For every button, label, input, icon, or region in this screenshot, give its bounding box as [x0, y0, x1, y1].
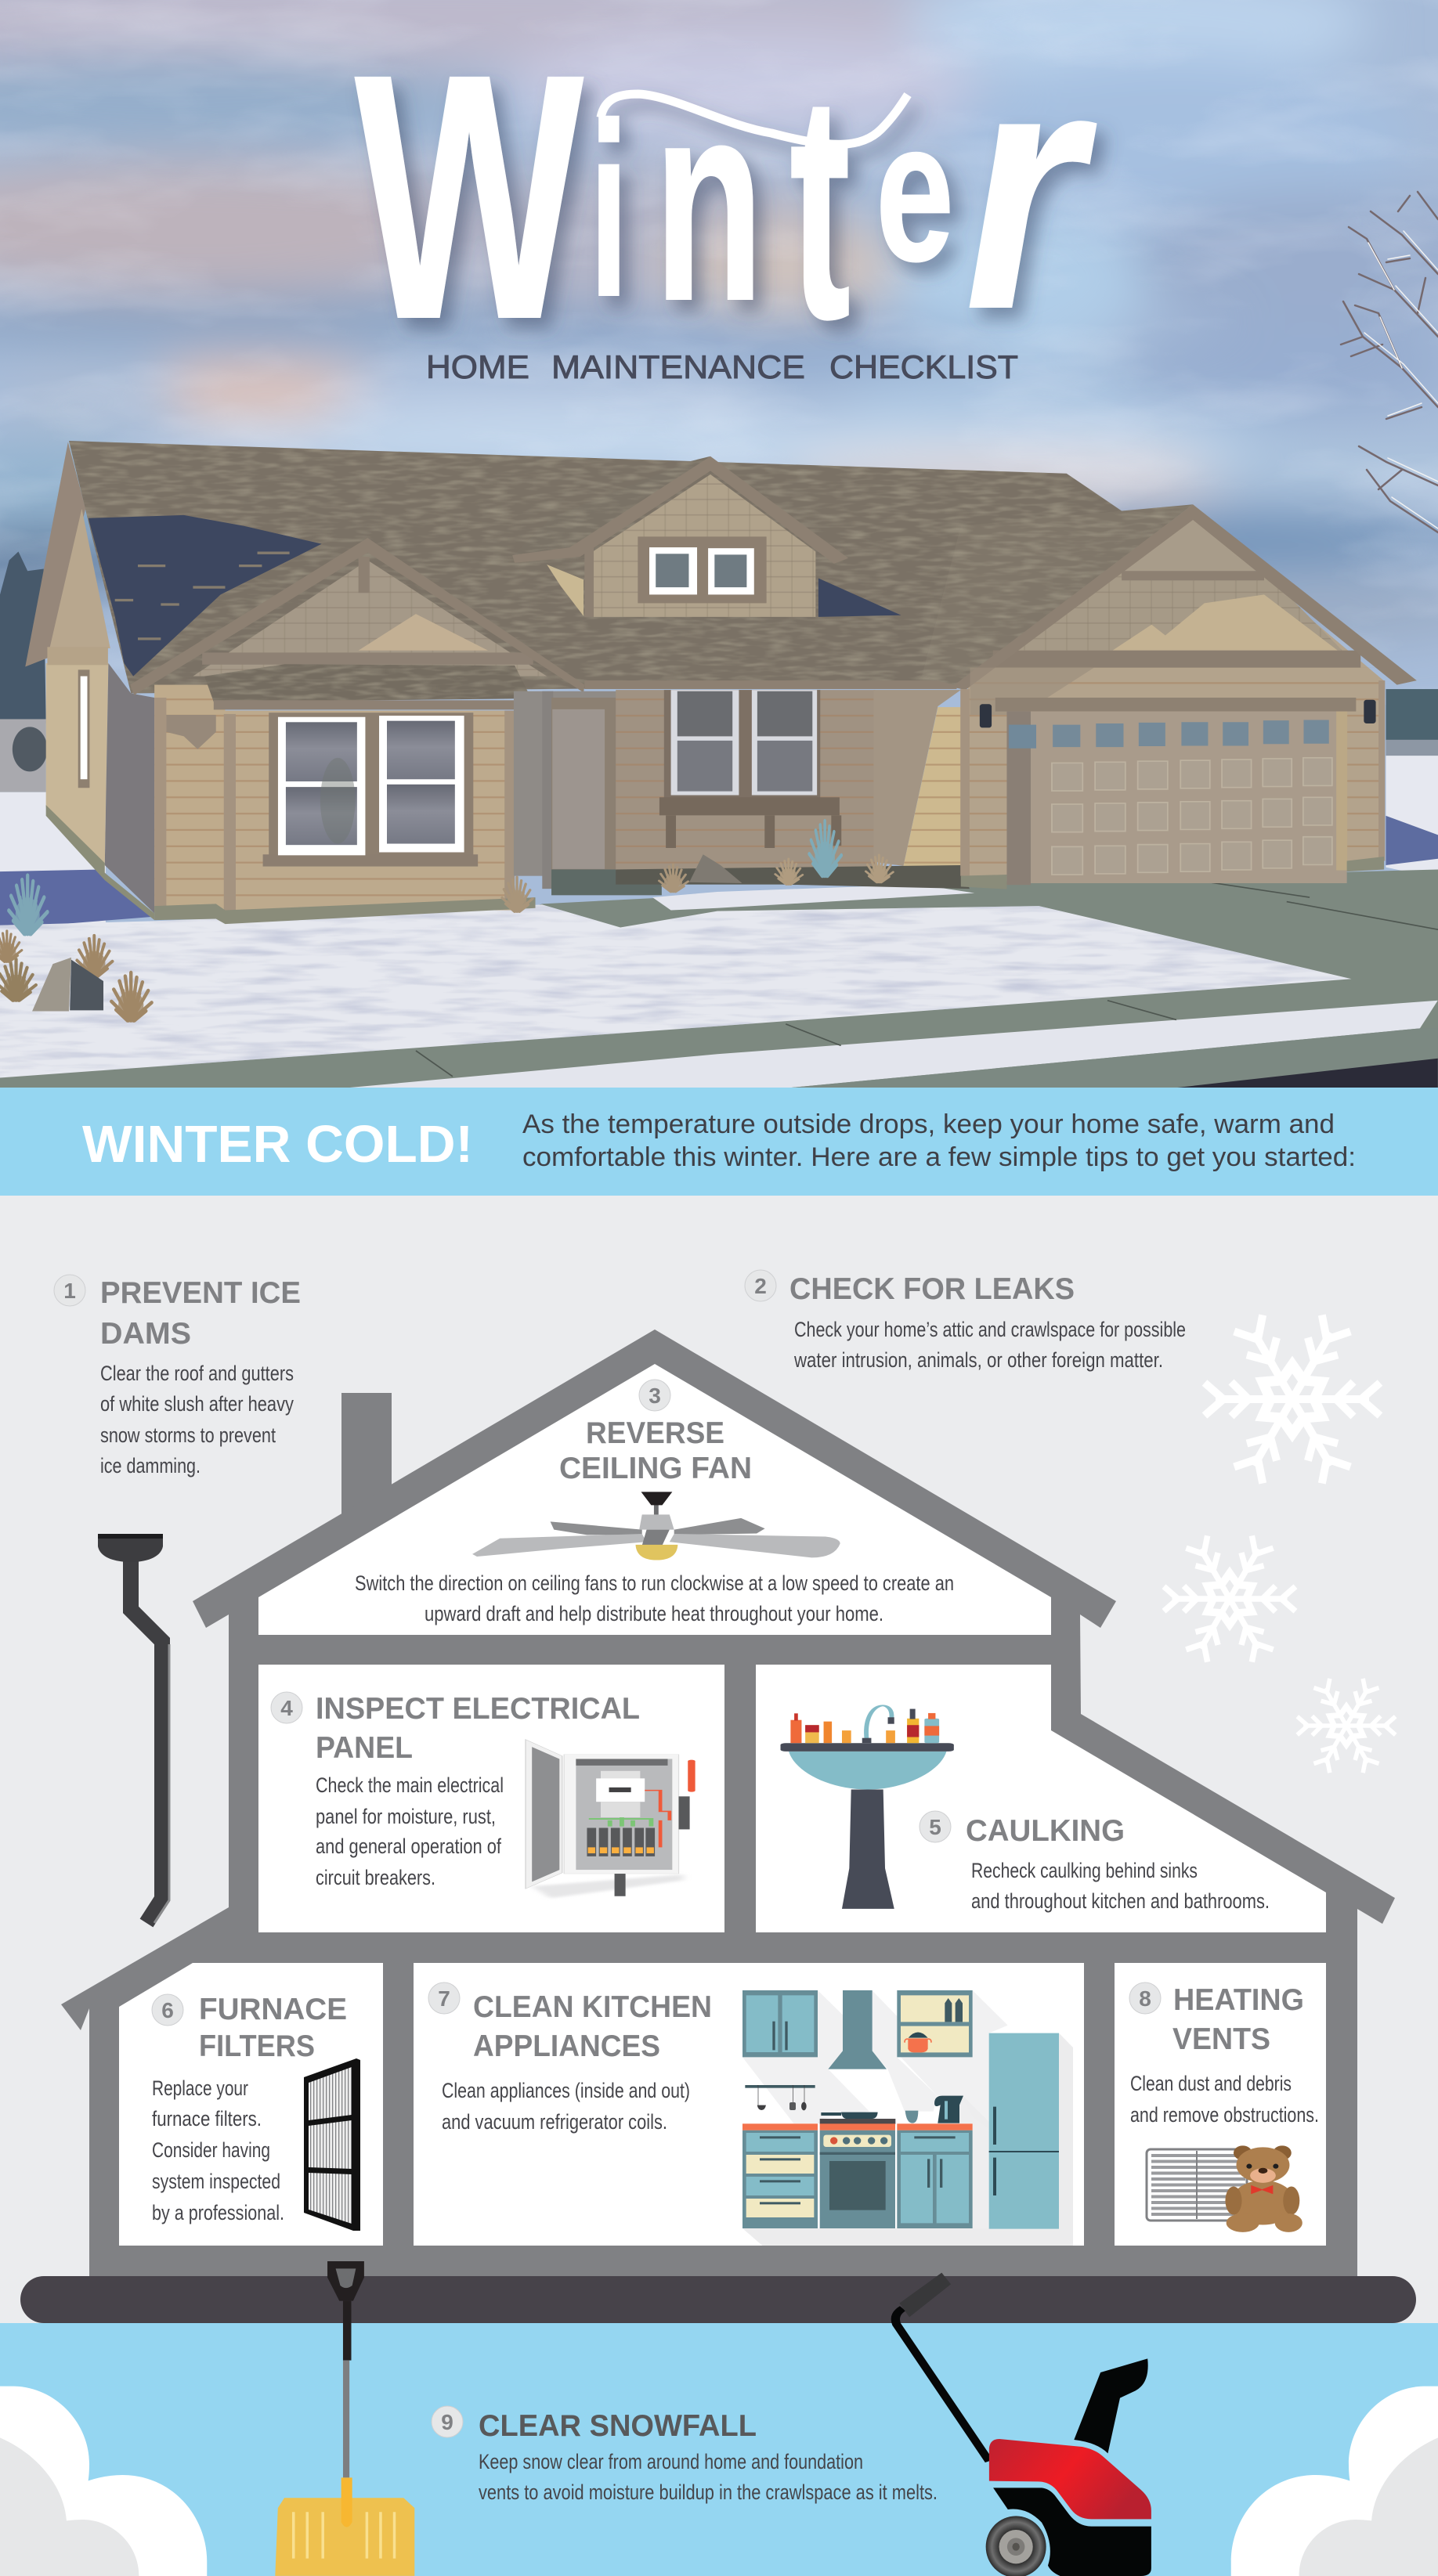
title word: e — [876, 80, 954, 303]
body 2: Check your home’s attic and crawlspace for possible — [794, 1318, 1186, 1341]
heading 5: CAULKING — [966, 1814, 1125, 1848]
intro text — [522, 1109, 1356, 1172]
room: furnace filters — [119, 1963, 383, 2246]
body 6: Consider having — [152, 2138, 270, 2162]
body 4: Check the main electrical — [316, 1773, 504, 1797]
bare tree branches — [1341, 192, 1438, 532]
main roof — [69, 441, 1122, 694]
number badge 9: 9 — [441, 2410, 453, 2434]
number badge 8 — [1129, 1983, 1161, 2014]
snowy ground and driveway — [0, 756, 1438, 1089]
number badge 4: 4 — [280, 1696, 293, 1720]
wall lamps — [980, 700, 1376, 727]
icon: air vent — [1147, 2149, 1247, 2221]
heading 7: CLEAN KITCHEN — [473, 1990, 712, 2024]
number badge 6 — [152, 1994, 183, 2026]
heading: Winter Cold: WINTER COLD! — [82, 1115, 473, 1174]
heading 8: HEATING — [1173, 1983, 1304, 2017]
body 9: vents to avoid moisture buildup in the crawlspace as it melts. — [479, 2480, 938, 2504]
heading 3: CEILING FAN — [559, 1452, 752, 1485]
title: Winter — [355, 0, 1097, 391]
icon: snow blower — [895, 2273, 1151, 2576]
heading 7: APPLIANCES — [473, 2029, 660, 2063]
room: caulking — [756, 1665, 1326, 1932]
garage door — [961, 712, 1384, 889]
tip 1: prevent ice dams — [54, 1275, 301, 1477]
number badge 1: 1 — [63, 1279, 76, 1303]
bay window — [263, 713, 478, 867]
left gable end wall — [25, 442, 154, 920]
background trees and field — [0, 552, 1438, 792]
heading 2: CHECK FOR LEAKS — [789, 1272, 1075, 1306]
tip 7: clean kitchen appliances — [428, 1983, 1073, 2246]
photo: winter sky and house — [0, 0, 1438, 1089]
icon: snowflake large — [1205, 1315, 1380, 1484]
cloud: right — [1231, 2387, 1438, 2576]
icon: snowflake small — [1297, 1679, 1396, 1773]
body 3: Switch the direction on ceiling fans to run clockwise at a low speed to create an — [355, 1571, 954, 1595]
room: heating vents — [1115, 1963, 1326, 2246]
title word: n — [654, 41, 764, 359]
tip 8: heating vents — [1129, 1983, 1319, 2232]
icon: electrical panel — [526, 1740, 696, 1898]
subtitle: MAINTENANCE — [551, 348, 805, 385]
garage gable and wall — [952, 504, 1417, 876]
heading 4: PANEL — [316, 1731, 413, 1765]
icon: downspout — [98, 1534, 169, 1923]
tip 6: furnace filters — [152, 1993, 360, 2231]
number badge 3: 3 — [649, 1384, 661, 1408]
body 5: and throughout kitchen and bathrooms. — [971, 1889, 1270, 1913]
title flourish — [601, 94, 908, 144]
body 9: Keep snow clear from around home and foundation — [479, 2450, 863, 2473]
body 3: upward draft and help distribute heat throughout your home. — [425, 1602, 883, 1625]
body 5: Recheck caulking behind sinks — [971, 1859, 1198, 1882]
body 4: circuit breakers. — [316, 1866, 435, 1889]
icon: teddy bear — [1225, 2145, 1303, 2232]
heading 6: FURNACE — [199, 1993, 347, 2026]
title word: t — [789, 27, 851, 385]
icon: snowflake medium — [1164, 1535, 1295, 1662]
number badge 5: 5 — [929, 1815, 941, 1839]
body 4: and general operation of — [316, 1835, 501, 1858]
body 6: furnace filters. — [152, 2107, 262, 2130]
sky — [0, 0, 1438, 922]
icon: furnace filter — [304, 2058, 360, 2231]
icon: ceiling fan — [472, 1492, 840, 1560]
cloud: left — [0, 2387, 207, 2576]
title word: r — [965, 0, 1097, 381]
shrubs and rocks — [0, 821, 893, 1021]
body 1: of white slush after heavy — [100, 1392, 294, 1416]
room: electrical panel — [258, 1665, 724, 1932]
body 7: Clean appliances (inside and out) — [442, 2079, 690, 2102]
body 1: Clear the roof and gutters — [100, 1362, 294, 1385]
tip 2: check for leaks — [745, 1270, 1186, 1372]
number badge 2 — [745, 1270, 776, 1301]
roof shadow — [89, 515, 322, 676]
heading 9: CLEAR SNOWFALL — [479, 2409, 757, 2443]
foundation — [20, 2276, 1416, 2323]
porch wall and windows — [616, 690, 970, 889]
body 8: and remove obstructions. — [1130, 2103, 1319, 2127]
heading 6: FILTERS — [199, 2029, 315, 2063]
title word: i — [589, 72, 629, 348]
roof shadow flecks — [115, 552, 290, 640]
number badge 9 — [432, 2406, 463, 2437]
body 6: by a professional. — [152, 2201, 284, 2224]
body 8: Clean dust and debris — [1130, 2072, 1292, 2095]
body 7: and vacuum refrigerator coils. — [442, 2110, 667, 2134]
panel: intro band — [0, 1088, 1438, 1196]
heading 8: VENTS — [1172, 2022, 1270, 2056]
intro text: comfortable this winter. Here are a few simple tips to get you started: — [522, 1142, 1356, 1172]
number badge 5 — [920, 1811, 951, 1842]
intro text: As the temperature outside drops, keep your home safe, warm and — [522, 1109, 1335, 1139]
number badge 7 — [428, 1983, 460, 2014]
tip 5: caulking — [781, 1705, 1270, 1913]
subtitle: CHECKLIST — [829, 348, 1018, 385]
heading 1: PREVENT ICE — [100, 1276, 301, 1310]
entry wall and door — [514, 691, 662, 895]
right hip roof — [922, 504, 1193, 686]
icon: sink — [781, 1705, 954, 1909]
heading 4: INSPECT ELECTRICAL — [316, 1692, 640, 1726]
number badge 6: 6 — [161, 1998, 174, 2022]
center dormer — [512, 456, 901, 617]
subtitle: HOME — [426, 348, 529, 385]
tip 4: inspect electrical panel — [271, 1692, 696, 1898]
number badge 8: 8 — [1139, 1986, 1151, 2011]
number badge 1 — [54, 1275, 85, 1306]
number badge 2: 2 — [754, 1274, 767, 1298]
icon: kitchen — [742, 1990, 1073, 2246]
body 1: ice damming. — [100, 1454, 201, 1477]
heading 3: REVERSE — [586, 1416, 724, 1450]
tip 9: clear snowfall — [432, 2406, 938, 2504]
body 6: Replace your — [152, 2076, 248, 2100]
body 4: panel for moisture, rust, — [316, 1805, 496, 1828]
front left wing wall — [154, 685, 536, 924]
tip 3: reverse ceiling fan — [355, 1380, 954, 1625]
fascia — [584, 680, 957, 689]
heading 1: DAMS — [100, 1317, 191, 1351]
room: kitchen — [414, 1963, 1084, 2246]
house outline — [61, 1329, 1395, 2276]
icon: snow shovel — [275, 2261, 414, 2576]
title word: W — [355, 2, 586, 391]
porch roof — [204, 664, 532, 709]
number badge 3 — [639, 1380, 670, 1411]
panel: snow yard — [0, 2323, 1438, 2576]
body 1: snow storms to prevent — [100, 1423, 276, 1447]
body 2: water intrusion, animals, or other foreign matter. — [793, 1348, 1163, 1372]
room: attic — [258, 1364, 1051, 1635]
number badge 4 — [271, 1692, 302, 1723]
body 6: system inspected — [152, 2170, 280, 2193]
house scene drawn at zoom coordinates — [0, 441, 1438, 1089]
number badge 7: 7 — [438, 1986, 450, 2011]
front gable — [130, 538, 584, 695]
